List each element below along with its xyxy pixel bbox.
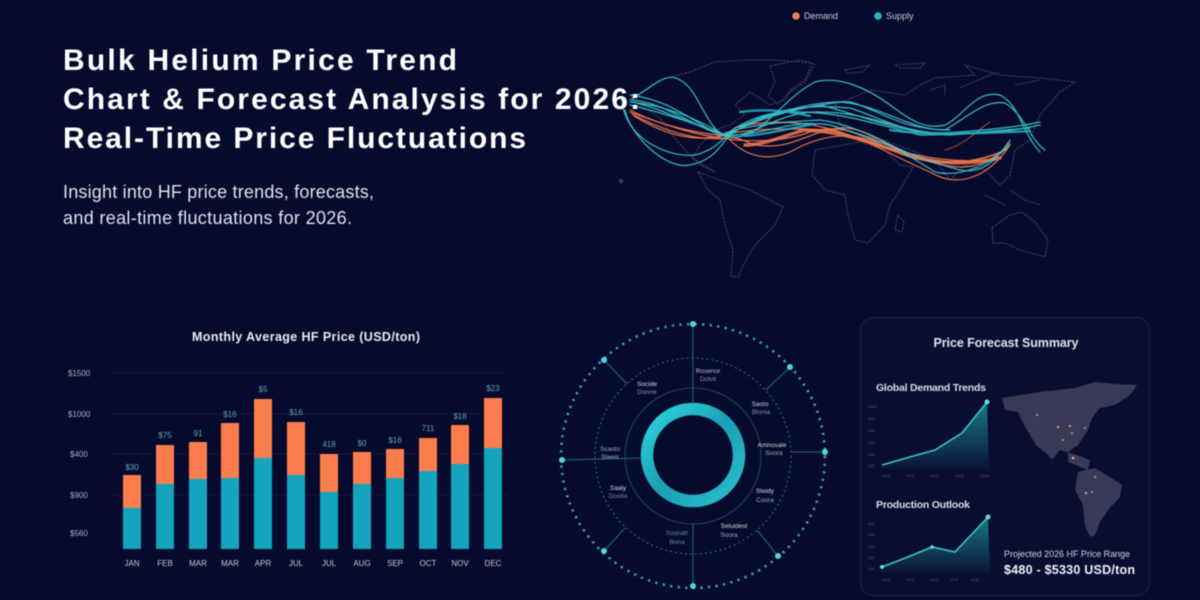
bar value labels: $0: [358, 439, 367, 448]
y axis labels and grid: $1000: [68, 410, 91, 419]
chart: production outlook: Production Outlook: [876, 499, 970, 511]
chart: global demand trends: [868, 382, 990, 478]
segment labels: Bona: [669, 539, 685, 546]
flow lines: supply: [622, 77, 1045, 173]
month labels: FEB: [157, 559, 173, 568]
bar chart: monthly average HF price: [68, 330, 508, 568]
spokes: [562, 324, 825, 586]
month labels: DEC: [485, 559, 502, 568]
y axis labels and grid: $1500: [68, 369, 91, 378]
chart: global demand trends: 200: [868, 452, 875, 457]
chart: global demand trends: 800: [868, 416, 875, 421]
chart: global demand trends: 2022: [882, 473, 892, 478]
segment labels: Saaly: [610, 485, 627, 492]
month labels: JUL: [322, 559, 337, 568]
segment labels: Dootia: [609, 493, 628, 500]
month labels: MAR: [189, 559, 207, 568]
bar value labels: $75: [158, 431, 172, 440]
outer dotted ring: [561, 324, 825, 588]
month labels: JUL: [289, 559, 304, 568]
month labels: MAR: [221, 559, 239, 568]
month labels: SEP: [387, 559, 403, 568]
bar value labels: $5: [259, 385, 268, 394]
chart title: Monthly Average HF Price (USD/ton): [192, 330, 420, 344]
month labels: NOV: [451, 559, 469, 568]
month labels: JAN: [124, 559, 140, 568]
legend: [792, 11, 914, 21]
segment labels: Steeis: [601, 454, 620, 461]
segment labels: Coora: [756, 497, 774, 504]
segment labels: Soonah: [666, 530, 689, 537]
y axis labels and grid: $400: [70, 450, 88, 459]
chart: global demand trends: 2023: [905, 473, 915, 478]
projected price range: [1004, 549, 1135, 577]
bar value labels: $23: [486, 384, 500, 393]
chart: global demand trends: Global Demand Trends: [876, 382, 986, 394]
segment labels: Blonia: [752, 409, 770, 416]
bar value labels: $30: [125, 463, 139, 472]
panel heading: Price Forecast Summary: [934, 336, 1079, 350]
title: Chart & Forecast Analysis for 2026:: [63, 83, 640, 116]
chart: global demand trends: 2024: [930, 473, 940, 478]
segment labels: Scasto: [600, 446, 620, 453]
chart: production outlook: 400: [868, 532, 875, 537]
month labels: [124, 559, 502, 568]
projected price range: $480 - $5330 USD/ton: [1004, 563, 1135, 577]
chart: production outlook: [868, 499, 990, 582]
subtitle: Insight into HF price trends, forecasts,: [63, 182, 374, 202]
world map outline: [618, 60, 1075, 277]
map: Americas: [1002, 382, 1137, 537]
panel: price forecast summary: [860, 318, 1150, 596]
chart: production outlook: 2023: [905, 577, 915, 582]
chart: production outlook: 500: [868, 521, 875, 526]
segment labels: Soora: [720, 532, 738, 539]
chart: production outlook: 2024: [930, 577, 940, 582]
bar value labels: [125, 384, 500, 472]
chart: production outlook: 200: [868, 555, 875, 560]
bar value labels: 91: [194, 429, 203, 438]
segment labels: Amnosale: [758, 442, 787, 449]
bar value labels: 418: [322, 440, 336, 449]
chart: global demand trends: 2026: [980, 473, 990, 478]
title: [63, 44, 640, 155]
month labels: APR: [255, 559, 271, 568]
y axis labels and grid: $900: [70, 491, 88, 500]
title: Real-Time Price Fluctuations: [63, 122, 526, 155]
month labels: AUG: [353, 559, 371, 568]
chart: production outlook: 2026: [970, 577, 980, 582]
chart: production outlook: 2025: [950, 577, 960, 582]
central donut: [647, 409, 739, 501]
segment labels: [600, 368, 787, 546]
radial diagram: [559, 321, 828, 589]
bars: supply: [123, 448, 502, 549]
chart: global demand trends: 1000: [868, 404, 878, 409]
title: Bulk Helium Price Trend: [63, 44, 457, 77]
segment labels: Donne: [637, 389, 657, 396]
subtitle: and real-time fluctuations for 2026.: [63, 208, 352, 228]
segment labels: Steidy: [756, 488, 775, 495]
month labels: OCT: [420, 559, 437, 568]
y axis labels and grid: [68, 369, 508, 538]
legend: Demand: [804, 11, 838, 21]
segment labels: Seluidest: [721, 523, 748, 530]
chart: global demand trends: 2025: [955, 473, 965, 478]
bar value labels: $16: [388, 436, 402, 445]
chart: global demand trends: 100: [868, 463, 875, 468]
y axis labels and grid: $560: [70, 529, 88, 538]
segment labels: Socide: [637, 381, 657, 388]
chart: production outlook: 2022: [882, 577, 892, 582]
segment labels: Dolvit: [700, 376, 716, 383]
supply and demand flow lines: [622, 77, 1045, 180]
chart: global demand trends: 600: [868, 428, 875, 433]
chart: production outlook: 100: [868, 566, 875, 571]
segment labels: Sasto: [752, 401, 769, 408]
bar value labels: $16: [223, 410, 237, 419]
chart: production outlook: 300: [868, 544, 875, 549]
bar value labels: $18: [453, 412, 467, 421]
spoke end nodes: [559, 321, 828, 589]
legend: Supply: [886, 11, 914, 21]
subtitle: [63, 182, 374, 228]
inner dashed ring: [595, 358, 791, 554]
bar value labels: 711: [422, 424, 435, 433]
segment labels: Rosenor: [696, 368, 721, 375]
flow lines: demand: [630, 110, 1010, 180]
projected price range: Projected 2026 HF Price Range: [1004, 549, 1130, 559]
segment labels: Soora: [765, 450, 783, 457]
bar value labels: $16: [289, 408, 303, 417]
bars: demand: [123, 398, 502, 508]
chart: global demand trends: 400: [868, 440, 875, 445]
